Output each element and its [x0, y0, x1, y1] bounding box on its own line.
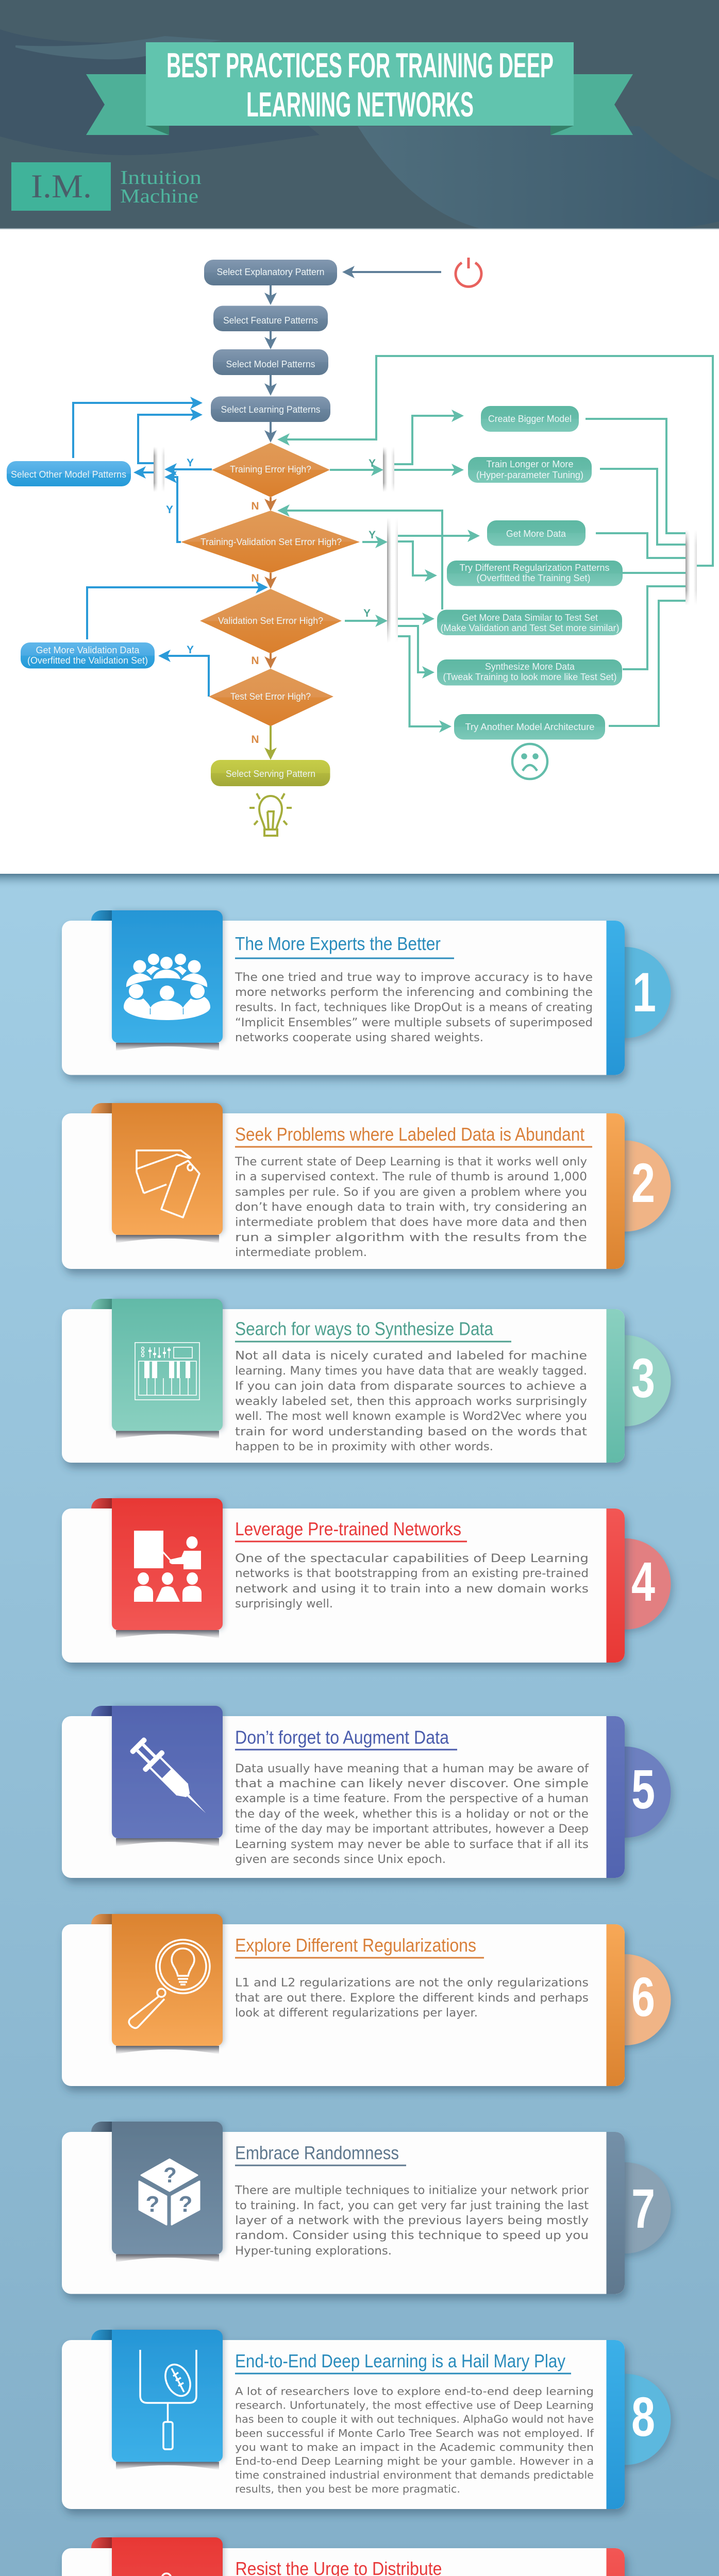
step: Get More Data Similar to Test Set	[437, 610, 622, 635]
icon: distributed network	[132, 2573, 203, 2576]
body: intermediate problem.	[235, 1246, 367, 1259]
heading: End-to-End Deep Learning is a Hail Mary Play	[235, 2350, 565, 2371]
step: Select Model Patterns: Select Model Patterns	[226, 359, 315, 369]
decision: Validation Set Error High?	[200, 589, 342, 653]
body: given are seconds since Unix epoch.	[235, 1853, 446, 1866]
logo: Intuition	[120, 167, 202, 189]
card 6	[62, 1914, 671, 2086]
step: Select Feature Patterns	[213, 306, 328, 331]
decision: Training Error High?	[212, 443, 330, 497]
body: learning. Many times you have data that are weakly tagged.	[235, 1365, 587, 1378]
branch labels: Y	[187, 644, 194, 656]
body: Hyper-tuning explorations.	[235, 2245, 392, 2258]
step: Get More Validation Data: Get More Validation Data	[36, 645, 140, 655]
step: Try Different Regularization Patterns	[447, 561, 623, 586]
icon: magnifier with bulb	[129, 1940, 210, 2028]
body	[235, 1156, 587, 1259]
body: results. In fact, techniques like DropOut is a means of creating	[235, 1002, 593, 1014]
body: random. Consider using this technique to speed up you	[235, 2229, 589, 2242]
number: 4	[631, 1550, 655, 1613]
branch labels	[166, 457, 376, 745]
icon: sad face	[512, 744, 547, 779]
step: Try Another Model Architecture: Try Another Model Architecture	[465, 721, 595, 732]
step: Synthesize More Data: Synthesize More Data	[485, 661, 575, 672]
icon: power	[456, 258, 481, 286]
body: There are multiple techniques to initialize your network prior	[235, 2184, 589, 2197]
step: Select Explanatory Pattern	[204, 260, 337, 285]
icon: question dice: ?	[146, 2192, 159, 2217]
step: Get More Data Similar to Test Set: Get More Data Similar to Test Set	[462, 612, 598, 623]
arrow: to serving pattern	[270, 726, 272, 756]
branch labels: N	[251, 655, 259, 667]
decision: Test Set Error High?: Test Set Error High?	[230, 691, 311, 702]
heading: Don’t forget to Augment Data	[235, 1727, 449, 1748]
body: run a simpler algorithm with the results from the	[235, 1231, 587, 1244]
branch labels: Y	[363, 607, 371, 619]
card 8	[62, 2330, 671, 2509]
logo: I.M.	[31, 168, 92, 205]
body: that a machine can likely never discover. One simple	[235, 1777, 589, 1790]
arrows: brown No path	[270, 497, 272, 665]
heading: Search for ways to Synthesize Data	[235, 1318, 494, 1340]
step: Get More Validation Data: (Overfitted the Validation Set)	[27, 655, 148, 666]
line crossing strips	[154, 447, 697, 643]
body: weakly labeled set, then this approach works surprisingly	[235, 1395, 587, 1408]
title banner: LEARNING NETWORKS	[246, 85, 474, 124]
icon: meeting group	[124, 954, 210, 1020]
step: Create Bigger Model	[481, 406, 579, 432]
heading: Embrace Randomness	[235, 2142, 399, 2163]
step: Select Other Model Patterns	[7, 461, 131, 486]
icon: teacher and students	[134, 1531, 202, 1602]
step: Train Longer or More: (Hyper-parameter Tuning)	[476, 469, 583, 480]
icon: question dice: ?	[163, 2163, 177, 2187]
step: Synthesize More Data: (Tweak Training to look more like Test Set)	[443, 671, 616, 682]
decision: Test Set Error High?	[209, 669, 333, 726]
body: example is a time feature. From the perspective of a human	[235, 1792, 589, 1805]
decision: Training-Validation Set Error High?: Training-Validation Set Error High?	[200, 536, 342, 547]
body: look at different regularizations per layer.	[235, 2007, 478, 2020]
number: 2	[631, 1151, 655, 1214]
body: If you can join data from disparate sources to achieve a	[235, 1380, 587, 1393]
body: Data usually have meaning that a human may be aware of	[235, 1762, 589, 1775]
body: you want to make an impact in the Academic community then	[235, 2441, 594, 2453]
body: layer of a network with the previous layers being mostly	[235, 2214, 589, 2227]
body: A lot of researchers love to explore end-to-end deep learning	[235, 2385, 594, 2398]
step: Select Feature Patterns: Select Feature Patterns	[223, 315, 318, 326]
icon: synthesizer keyboard	[135, 1343, 199, 1400]
step: Select Explanatory Pattern: Select Explanatory Pattern	[216, 266, 325, 277]
step: Select Other Model Patterns: Select Other Model Patterns	[11, 469, 126, 480]
body	[235, 1976, 589, 2020]
step: Train Longer or More: Train Longer or More	[487, 459, 573, 469]
heading: Leverage Pre-trained Networks	[235, 1518, 461, 1539]
branch labels: N	[251, 734, 259, 745]
step: Get More Data	[487, 520, 586, 546]
body: more networks perform the inferencing and combining the	[235, 986, 593, 999]
icon: goal post and football	[140, 2350, 196, 2449]
connectors: teal right-hand routing	[281, 356, 713, 726]
body	[235, 1350, 587, 1453]
icon: light bulb	[249, 793, 292, 836]
body: to training. In fact, you can get very far just training the last	[235, 2199, 589, 2212]
body	[235, 1552, 589, 1611]
body: time of the day may be important attributes, however a Deep	[235, 1823, 589, 1836]
number: 5	[631, 1758, 655, 1820]
card 4	[62, 1498, 671, 1663]
title banner	[86, 42, 633, 135]
logo: Machine	[120, 185, 198, 207]
step: Select Serving Pattern: Select Serving Pattern	[226, 768, 315, 779]
body: happen to be in proximity with other words.	[235, 1440, 493, 1453]
body: Not all data is nicely curated and labeled for machine	[235, 1350, 587, 1362]
number: 7	[631, 2177, 655, 2240]
body: samples per rule. So if you are given a problem where you	[235, 1186, 587, 1199]
step: Create Bigger Model: Create Bigger Model	[488, 413, 572, 424]
icon: question dice	[139, 2159, 199, 2225]
number: 6	[631, 1965, 655, 2028]
decision: Training Error High?: Training Error High?	[230, 464, 311, 474]
card 3	[62, 1299, 671, 1463]
body: End-to-end Deep Learning might be your gamble. However in a	[235, 2455, 594, 2467]
body: in a supervised context. The rule of thumb is around 1,000	[235, 1171, 587, 1183]
decision: Training-Validation Set Error High?	[181, 511, 360, 573]
body: “Implicit Ensembles” were multiple subsets of superimposed	[235, 1016, 593, 1029]
step: Try Different Regularization Patterns: Try Different Regularization Patterns	[460, 562, 609, 573]
step: Select Learning Patterns: Select Learning Patterns	[221, 404, 321, 415]
body	[235, 1762, 589, 1866]
body: network and using it to train into a new domain works	[235, 1583, 589, 1596]
icon: question dice: ?	[179, 2192, 192, 2217]
card 9	[62, 2537, 671, 2576]
number: 3	[631, 1347, 655, 1409]
step: Select Serving Pattern	[211, 760, 330, 786]
step: Try Different Regularization Patterns: (Overfitted the Training Set)	[476, 572, 591, 583]
body: research. Unfortunately, the most effective use of Deep Learning	[235, 2399, 594, 2411]
heading: Explore Different Regularizations	[235, 1935, 476, 1956]
body: results, then you best be more pragmatic.	[235, 2483, 460, 2495]
card 7	[62, 2122, 671, 2294]
step: Train Longer or More	[468, 457, 592, 483]
step: Get More Data: Get More Data	[506, 528, 566, 539]
body: Learning system may never be able to surface that if all its	[235, 1838, 589, 1851]
body: been successful if Monte Carlo Tree Search was not employed. If	[235, 2427, 594, 2439]
body: One of the spectacular capabilities of Deep Learning	[235, 1552, 589, 1565]
body: well. The most well known example is Word2Vec where you	[235, 1410, 587, 1423]
body	[235, 971, 593, 1044]
body	[235, 2385, 594, 2495]
body: surprisingly well.	[235, 1598, 333, 1611]
card 2	[62, 1103, 671, 1269]
icon: syringe	[127, 1734, 215, 1823]
branch labels: Y	[187, 457, 194, 469]
branch labels: N	[251, 500, 259, 512]
step: Synthesize More Data	[437, 659, 622, 685]
body: train for word understanding based on the words that	[235, 1426, 587, 1438]
card 1	[62, 910, 671, 1075]
number: 1	[632, 961, 656, 1023]
heading: Seek Problems where Labeled Data is Abundant	[235, 1124, 584, 1145]
step: Select Model Patterns	[213, 349, 328, 375]
decision: Validation Set Error High?: Validation Set Error High?	[218, 615, 323, 626]
arrows: main slate path	[271, 272, 441, 438]
body: don’t have enough data to train with, try considering an	[235, 1201, 587, 1214]
icon: tags	[137, 1150, 199, 1217]
body: L1 and L2 regularizations are not the only regularizations	[235, 1976, 589, 1990]
step: Get More Validation Data	[21, 642, 155, 669]
body: has been to couple it with out techniques. AlphaGo would not have	[235, 2413, 594, 2426]
body	[235, 2184, 589, 2258]
step: Select Learning Patterns	[211, 397, 330, 422]
body: the day of the week, whether this is a holiday or not or the	[235, 1808, 589, 1821]
body: intermediate problem that does have more data and then	[235, 1216, 587, 1229]
body: networks cooperate using shared weights.	[235, 1031, 483, 1044]
logo	[11, 162, 202, 211]
panel: flowchart	[0, 229, 719, 874]
body: that are out there. Explore the different kinds and perhaps	[235, 1992, 589, 2005]
connectors: blue retry routing	[73, 403, 264, 697]
body: networks is that bootstrapping from an existing pre-trained	[235, 1567, 589, 1580]
branch labels: Y	[166, 504, 173, 516]
branch labels: Y	[369, 457, 376, 469]
card 5	[62, 1706, 671, 1878]
branch labels: N	[251, 572, 259, 584]
step: Try Another Model Architecture	[454, 714, 605, 740]
body: The current state of Deep Learning is that it works well only	[235, 1156, 587, 1168]
step: Get More Data Similar to Test Set: (Make Validation and Test Set more similar)	[440, 622, 620, 633]
white flowchart panel shadow	[0, 874, 719, 890]
body: time constrained industrial environment that demands predictable	[235, 2469, 594, 2481]
header	[0, 0, 719, 229]
heading: The More Experts the Better	[235, 933, 441, 954]
body: The one tried and true way to improve accuracy is to have	[235, 971, 593, 984]
branch labels: Y	[369, 529, 376, 541]
number: 8	[631, 2385, 655, 2448]
